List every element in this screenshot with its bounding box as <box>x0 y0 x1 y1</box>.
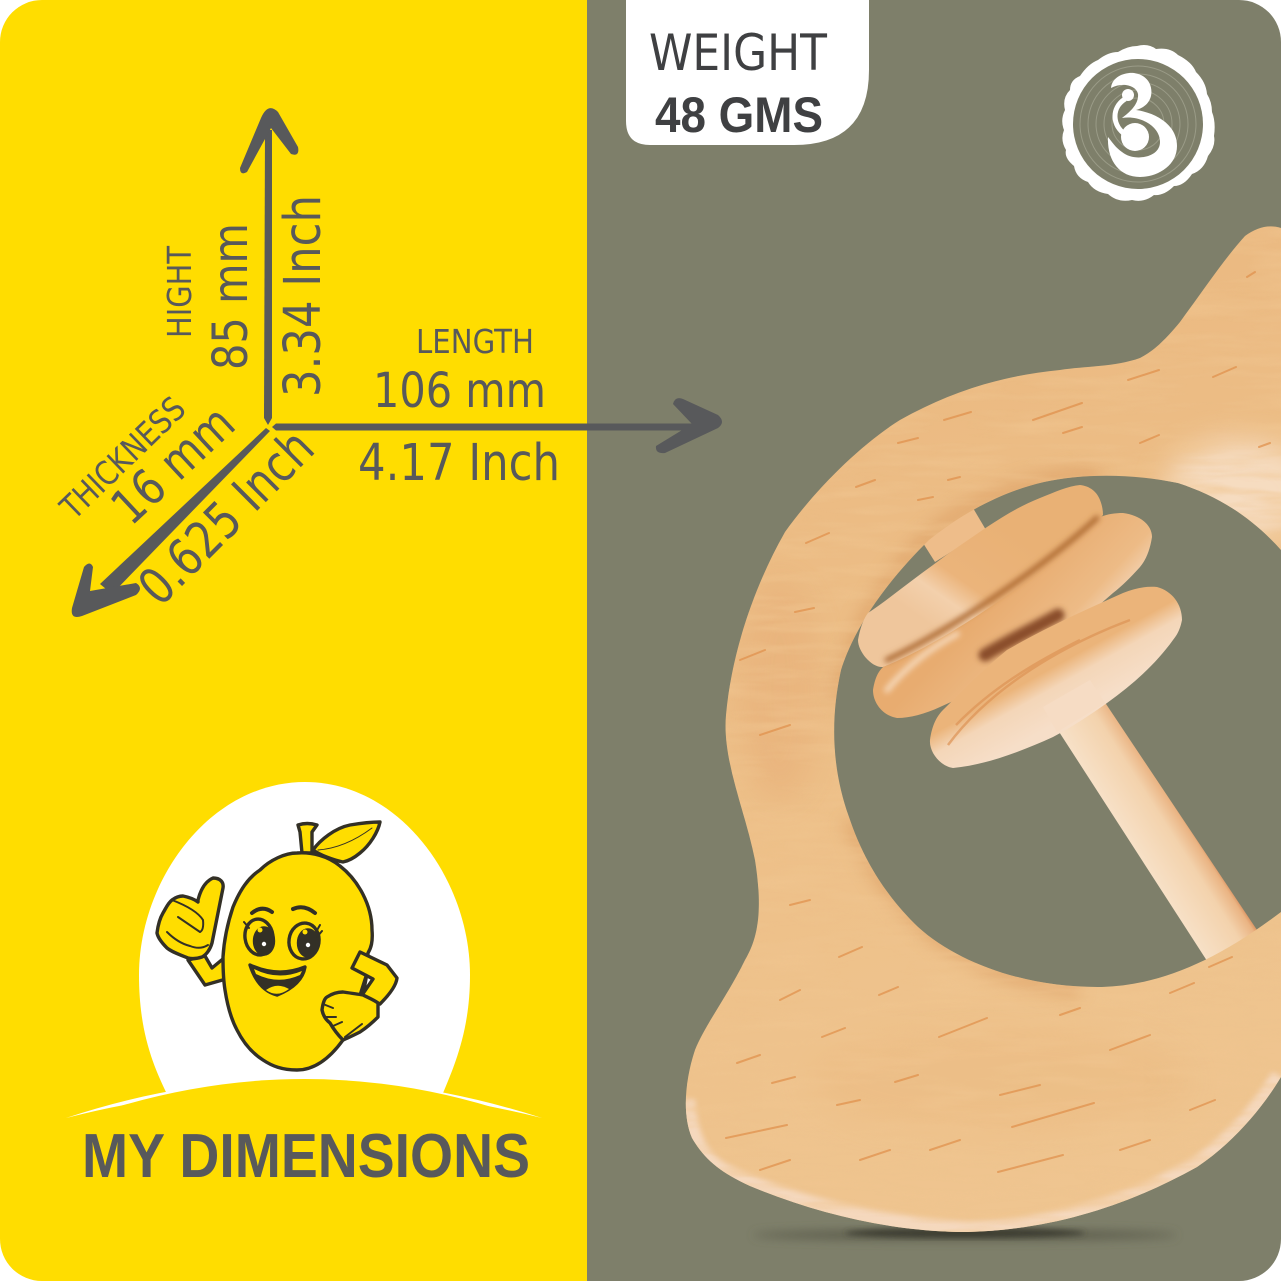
rattle shadow <box>753 1228 1177 1240</box>
mango fist <box>322 992 378 1040</box>
wooden rattle <box>680 220 1281 1240</box>
mango left arm <box>188 956 226 985</box>
panel: olive product <box>587 0 1281 1281</box>
rattle stick collar <box>1043 680 1105 732</box>
weight badge: WEIGHT <box>649 24 827 82</box>
weight badge: 48 GMS <box>655 87 823 143</box>
title: my dimensions: MY DIMENSIONS <box>82 1122 530 1191</box>
rattle ring body <box>680 220 1281 1240</box>
rattle stick lower <box>1060 704 1256 960</box>
rattle stick upper <box>923 508 986 562</box>
rattle center shadow <box>985 615 1058 655</box>
arrow: thickness <box>72 428 270 617</box>
hill arc <box>66 1079 542 1118</box>
arrow: height <box>240 108 298 425</box>
label: height <box>160 195 333 397</box>
label: height: HIGHT <box>160 245 199 338</box>
label: thickness <box>52 389 326 617</box>
ring left mottling <box>756 621 804 782</box>
label: thickness: THICKNESS <box>52 389 193 527</box>
arrow: length <box>272 398 722 453</box>
panel: yellow dimensions <box>0 0 587 1281</box>
rattle disc 3 <box>930 587 1182 768</box>
rattle disc 2 <box>873 513 1152 718</box>
weight badge <box>626 0 869 145</box>
ring bottom rim highlight <box>685 1077 1281 1232</box>
wood texture <box>680 220 1281 1240</box>
mango stem <box>298 824 317 853</box>
mango eyebrows <box>252 907 315 913</box>
label: length: LENGTH <box>416 322 534 361</box>
label: thickness: 0.625 Inch <box>127 418 326 617</box>
label: height: 85 mm <box>203 223 259 370</box>
label: height: 3.34 Inch <box>274 195 333 397</box>
mango thumbs-up hand <box>157 878 223 959</box>
mango right arm <box>352 952 397 1004</box>
rattle disc 3 band <box>948 620 1130 745</box>
icon: brand logo <box>1062 45 1215 201</box>
mascot backdrop egg <box>139 782 470 1100</box>
label: thickness: 16 mm <box>100 395 246 536</box>
mango eyes <box>243 917 275 957</box>
rattle disc 1 <box>858 485 1103 667</box>
mango leaf <box>313 822 380 862</box>
icon: mango mascot <box>157 822 397 1070</box>
ring inner shadow <box>838 474 1100 990</box>
mango smile <box>250 965 305 995</box>
mango body <box>223 853 372 1070</box>
rattle disc 2 highlight <box>887 634 957 690</box>
rattle groove shadow <box>887 518 1097 660</box>
label: length <box>358 322 560 493</box>
label: length: 4.17 Inch <box>358 434 560 493</box>
wood grain <box>726 272 1270 1172</box>
ring tail highlight <box>1165 440 1281 540</box>
label: length: 106 mm <box>373 363 546 419</box>
